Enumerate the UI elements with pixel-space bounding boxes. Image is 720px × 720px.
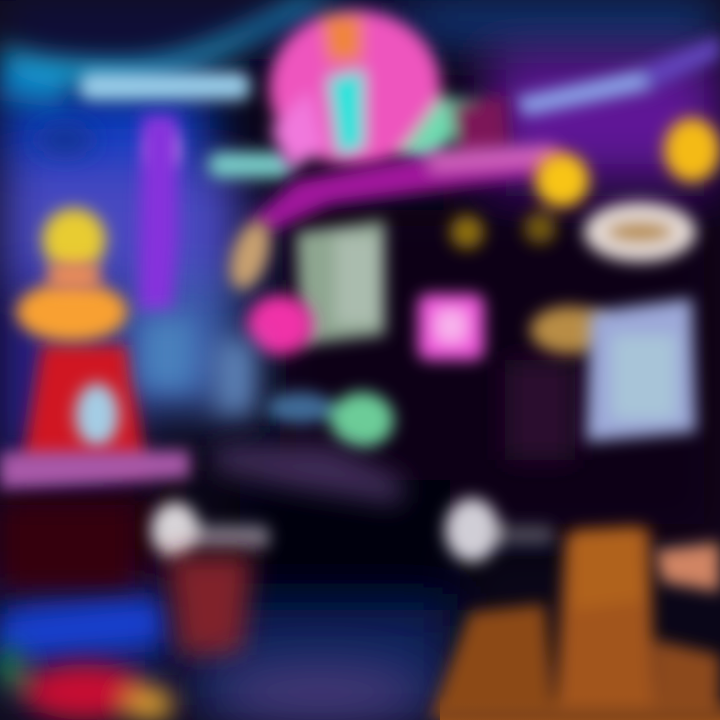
white oval sign (584, 202, 696, 262)
gumball machine (16, 208, 146, 468)
dark red cup (168, 555, 252, 655)
gumball machine window (75, 383, 119, 447)
salmon ledge (655, 542, 720, 592)
tan light left of screen (222, 215, 278, 295)
gumball machine orange band (16, 282, 128, 342)
cyan-green panel (266, 392, 394, 448)
purple column (138, 115, 178, 312)
gumball machine yellow top (42, 208, 106, 272)
pink blob (247, 295, 313, 355)
fruit at bottom left (0, 646, 174, 720)
heading text, blurred left (80, 72, 293, 178)
yellow lights (450, 118, 720, 249)
gumball machine neck (48, 262, 100, 290)
floor glow (210, 664, 430, 720)
wooden stacks (430, 526, 720, 720)
purple console (215, 445, 405, 505)
pink-white square button (418, 294, 484, 360)
right game screen (586, 298, 696, 442)
dark patch on blue wall (35, 126, 95, 154)
dark magenta machine panel (505, 360, 575, 460)
white blob right (445, 498, 555, 562)
blue base band (0, 600, 165, 655)
blue-grey figures (140, 318, 255, 415)
pink counter (0, 450, 190, 490)
magenta roof (250, 144, 565, 232)
wood base fade (440, 695, 720, 720)
white blob left (151, 502, 270, 558)
gumball machine red body (22, 345, 146, 468)
tan sign (530, 306, 610, 354)
cyan light streak (0, 0, 350, 108)
pink dome sign (269, 10, 510, 170)
central game screen (296, 220, 385, 345)
lower dark red cabinet (0, 505, 135, 590)
heading text, blurred right (515, 35, 720, 116)
